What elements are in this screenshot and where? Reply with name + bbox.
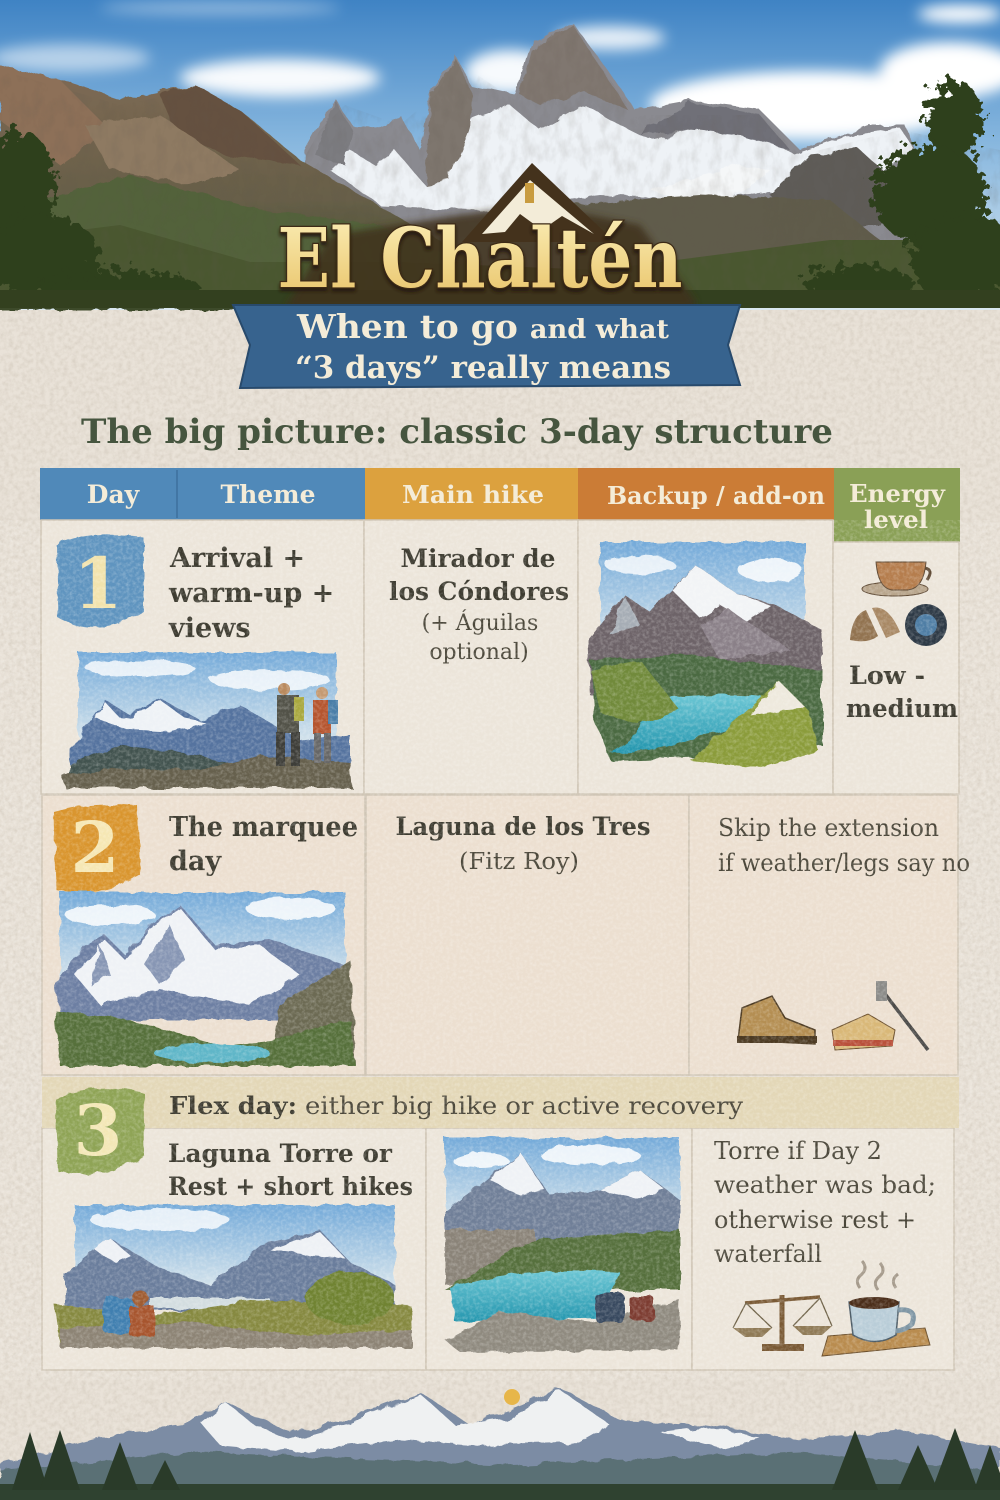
paper grain overlay <box>0 520 1000 1380</box>
energy level low-medium: Low - <box>849 661 925 690</box>
illustration: lake with waterfall and hikers <box>445 1138 680 1352</box>
day 1 theme text: warm-up + <box>168 578 334 609</box>
day 2 badge <box>54 804 140 893</box>
energy icons: coffee, boots, lens <box>850 562 947 646</box>
table header row: Main hike <box>402 480 544 509</box>
day 3 main hike text: Laguna Torre or <box>168 1139 393 1168</box>
day 1 main hike: Mirador de <box>400 544 556 573</box>
day 3 backup text: waterfall <box>714 1240 822 1268</box>
table header row: Day <box>87 480 141 509</box>
subtitle ribbon: When to go and what <box>296 307 669 346</box>
day 1 main hike: (+ Águilas <box>422 609 538 636</box>
illustration: resting hiker in valley <box>55 1205 412 1348</box>
day 3 backup text: otherwise rest + <box>714 1206 916 1234</box>
table header row: Theme <box>220 480 316 509</box>
illustration: snowy peaks and lake <box>55 892 356 1066</box>
day 3 backup text: weather was bad; <box>714 1171 936 1199</box>
day 3 badge <box>55 1088 144 1174</box>
table header row <box>40 468 960 542</box>
title: El Chaltén <box>278 211 682 307</box>
footer landscape <box>0 1388 1000 1500</box>
table header row: level <box>864 505 928 534</box>
day 2 main hike: Laguna de los Tres <box>396 812 650 841</box>
day 2 main hike <box>396 812 650 875</box>
day 2 main hike: (Fitz Roy) <box>459 849 579 875</box>
subtitle ribbon: “3 days” really means <box>295 350 671 386</box>
day 1 badge <box>56 535 143 627</box>
paper grain dark <box>0 308 1000 1500</box>
day 1 row panels <box>41 520 959 794</box>
day 1 badge: 1 <box>74 542 122 625</box>
header landscape <box>0 0 1000 310</box>
icons: boot, sandwich, trekking pole <box>737 981 928 1050</box>
day 1 theme text: Arrival + <box>169 543 305 574</box>
day 2 backup text: if weather/legs say no <box>718 849 970 877</box>
table header row: Energy <box>849 479 946 508</box>
day 3 flex banner: Flex day: <box>169 1091 297 1120</box>
day 2 row panels <box>42 795 958 1075</box>
illustration: hikers at viewpoint <box>62 652 352 788</box>
day 1 theme text: views <box>168 613 251 644</box>
day 2 theme text: The marquee <box>169 812 358 843</box>
day 1 main hike: optional) <box>429 640 529 665</box>
logo: mountain peak <box>462 163 615 242</box>
day 2 badge: 2 <box>71 806 119 889</box>
energy level low-medium: medium <box>846 694 958 723</box>
day 3 flex banner <box>42 1077 959 1128</box>
day 3 flex banner: either big hike or active recovery <box>305 1092 743 1120</box>
day 2 theme text: day <box>169 846 222 877</box>
table header row: Backup / add-on <box>607 481 825 510</box>
day 1 main hike: los Cóndores <box>389 577 569 606</box>
section heading: The big picture: classic 3-day structure <box>81 412 833 452</box>
day 1 main hike <box>389 544 569 665</box>
day 3 backup text: Torre if Day 2 <box>714 1137 882 1165</box>
icons: balance scale and steaming cup <box>733 1261 930 1356</box>
subtitle ribbon <box>233 305 740 388</box>
day 3 badge: 3 <box>74 1089 122 1172</box>
illustration: mountain and turquoise lake <box>588 542 822 768</box>
day 3 row panels <box>42 1128 954 1370</box>
day 2 backup text: Skip the extension <box>718 814 939 842</box>
day 3 main hike text: Rest + short hikes <box>168 1172 413 1201</box>
